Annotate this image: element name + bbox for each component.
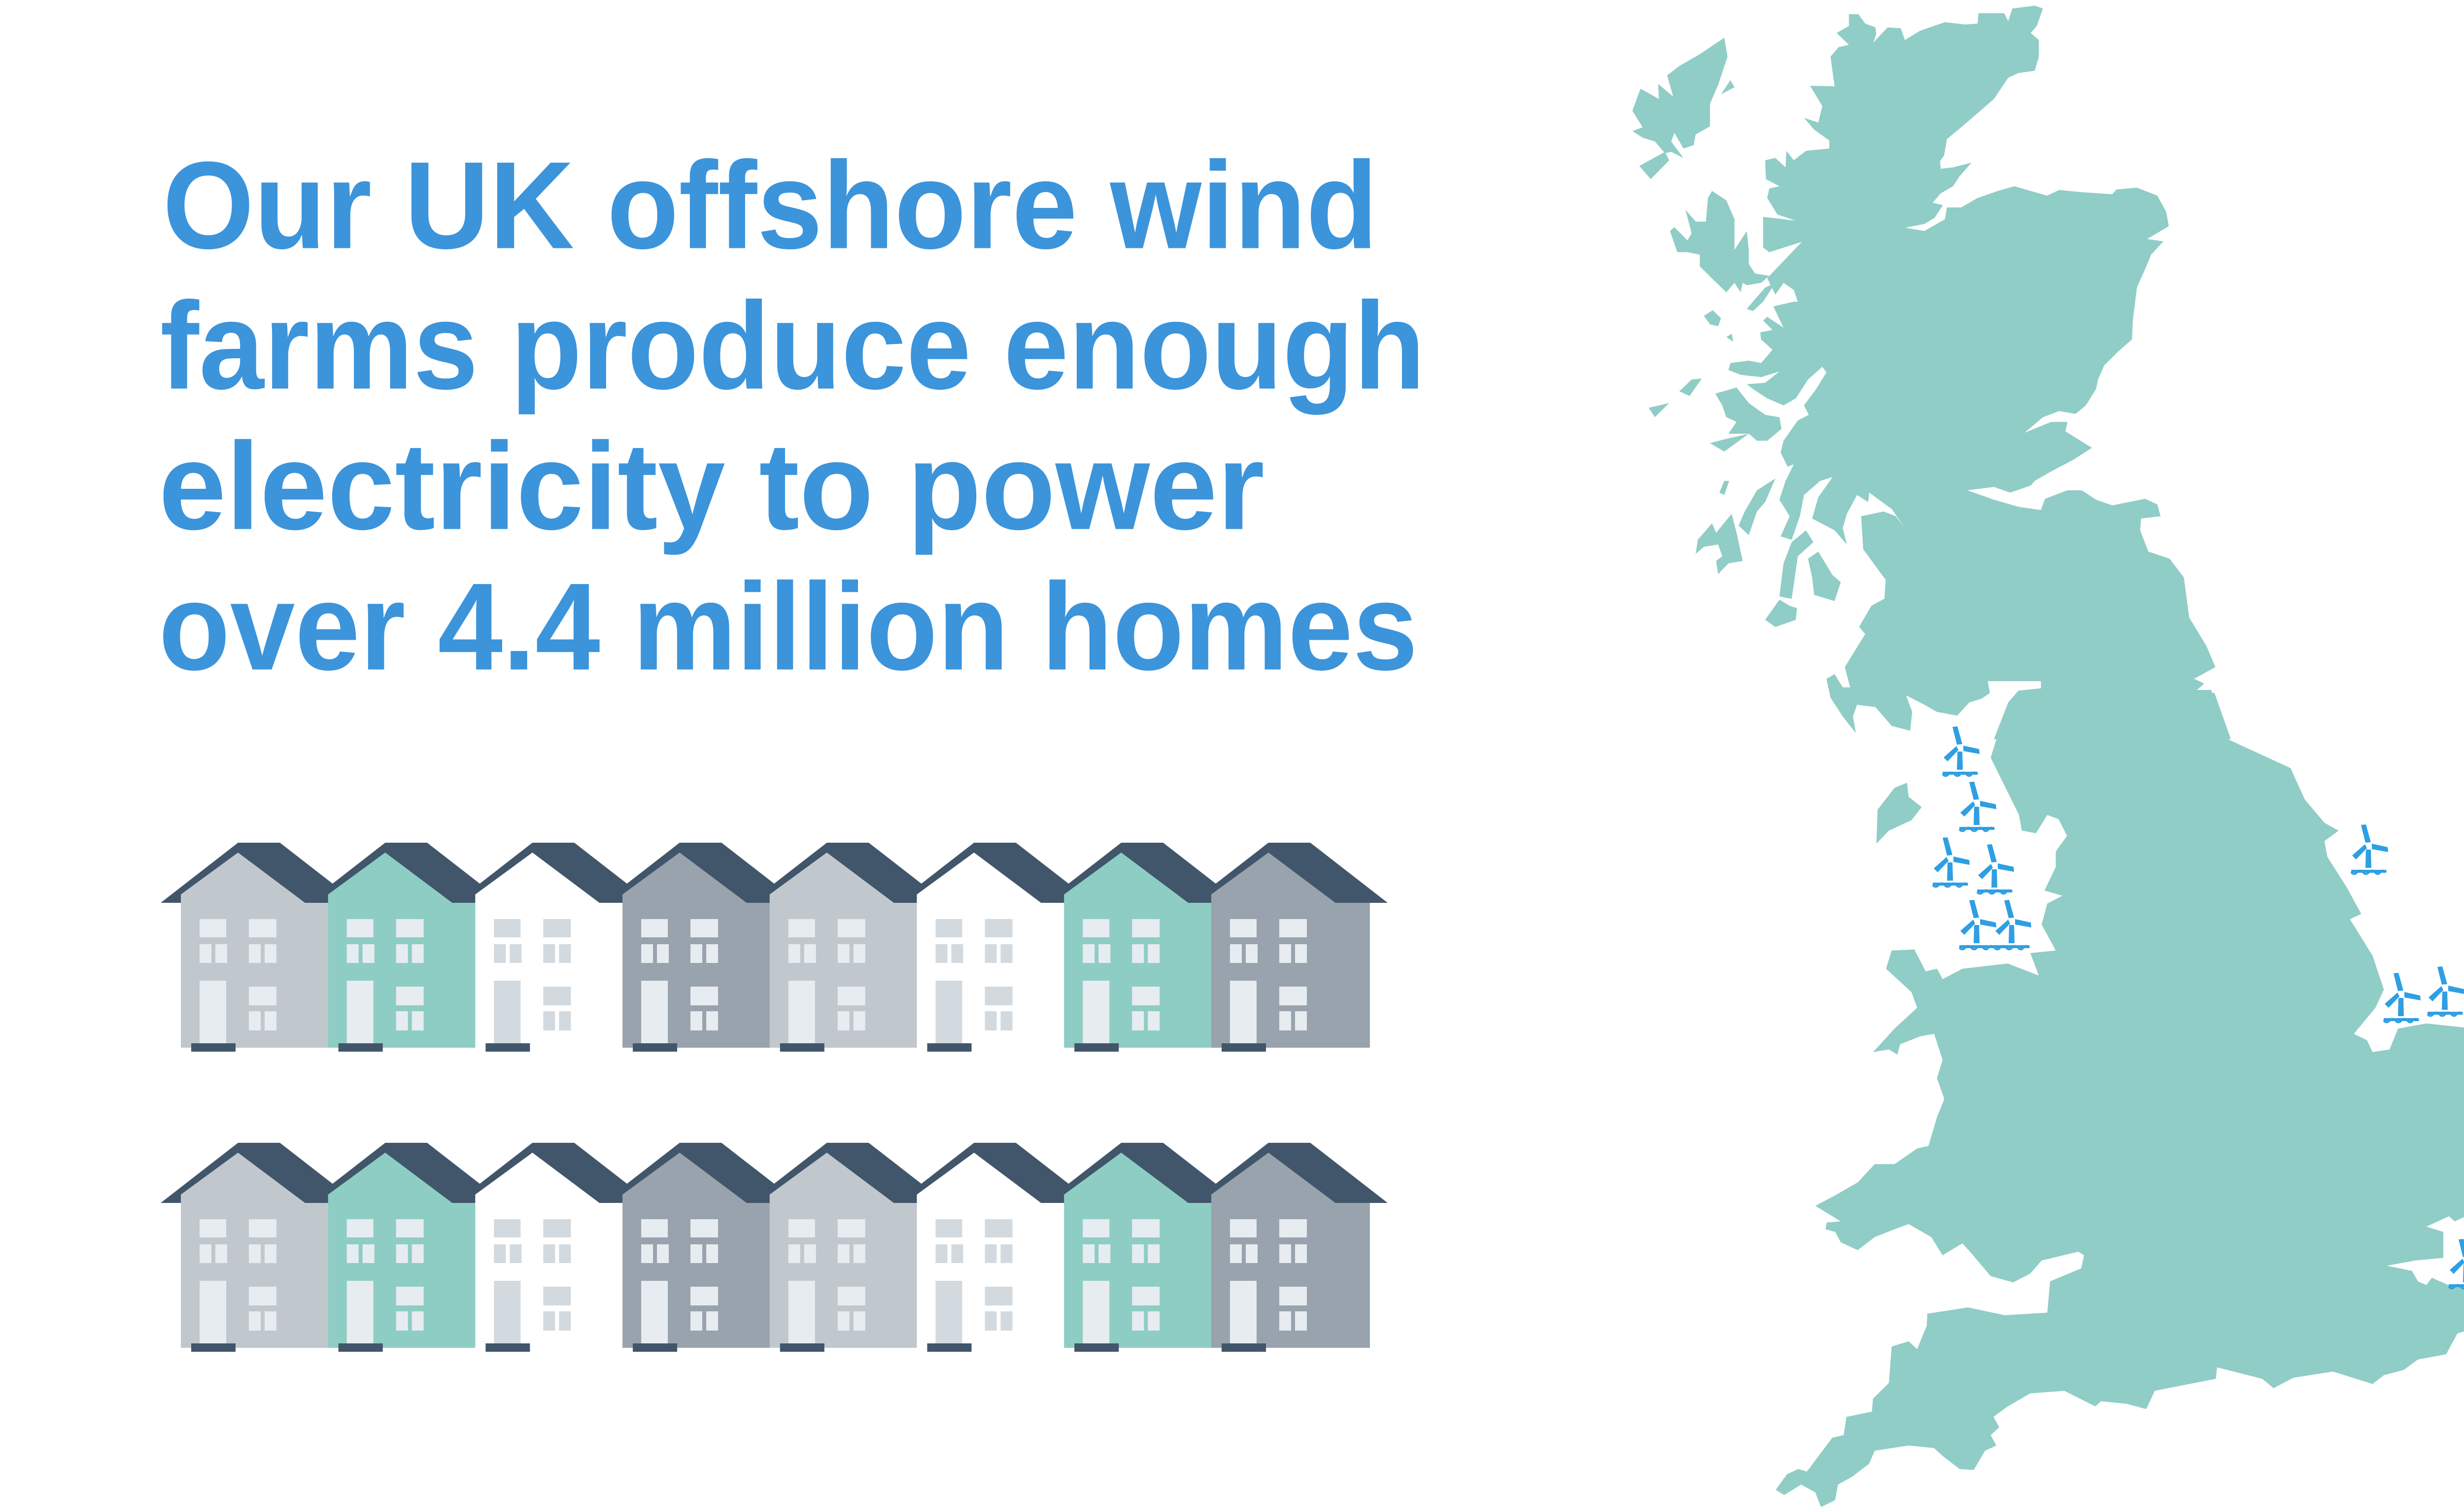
icon: wind turbine [1933,837,1970,887]
map: England and Wales [1776,690,2464,1507]
house: white [455,1143,651,1352]
icon: wind turbine [2449,1239,2464,1288]
title: electricity to power [159,417,1265,556]
house: teal [308,1143,505,1352]
icon: wind turbine [1959,900,1996,949]
house: dark grey [602,843,799,1052]
house: light grey [750,843,946,1052]
house: dark grey [1191,843,1388,1052]
map: Scotland and islands [1632,5,2231,739]
house: dark grey [1191,1143,1388,1352]
house: teal [1044,843,1240,1052]
icon: wind turbine [2351,824,2388,874]
house: white [455,843,651,1052]
house: light grey [750,1143,946,1352]
map of the UK [1632,5,2464,1507]
icon: wind turbine [2428,966,2464,1016]
house: teal [308,843,505,1052]
icon: wind turbine [1959,782,1996,831]
house: teal [1044,1143,1240,1352]
title [159,136,1425,696]
title: farms produce enough [160,277,1425,415]
houses: row 2 [161,1143,1388,1352]
wind farms [1933,726,2464,1288]
house: white [897,843,1093,1052]
icon: wind turbine [1994,900,2031,949]
house: dark grey [602,1143,799,1352]
title: Our UK offshore wind [163,136,1378,275]
house: light grey [161,843,357,1052]
icon: wind turbine [2384,973,2421,1022]
icon: wind turbine [1977,844,2014,894]
house: white [897,1143,1093,1352]
title: over 4.4 million homes [159,558,1418,696]
icon: wind turbine [1943,726,1980,776]
houses: row 1 [161,843,1388,1052]
house: light grey [161,1143,357,1352]
